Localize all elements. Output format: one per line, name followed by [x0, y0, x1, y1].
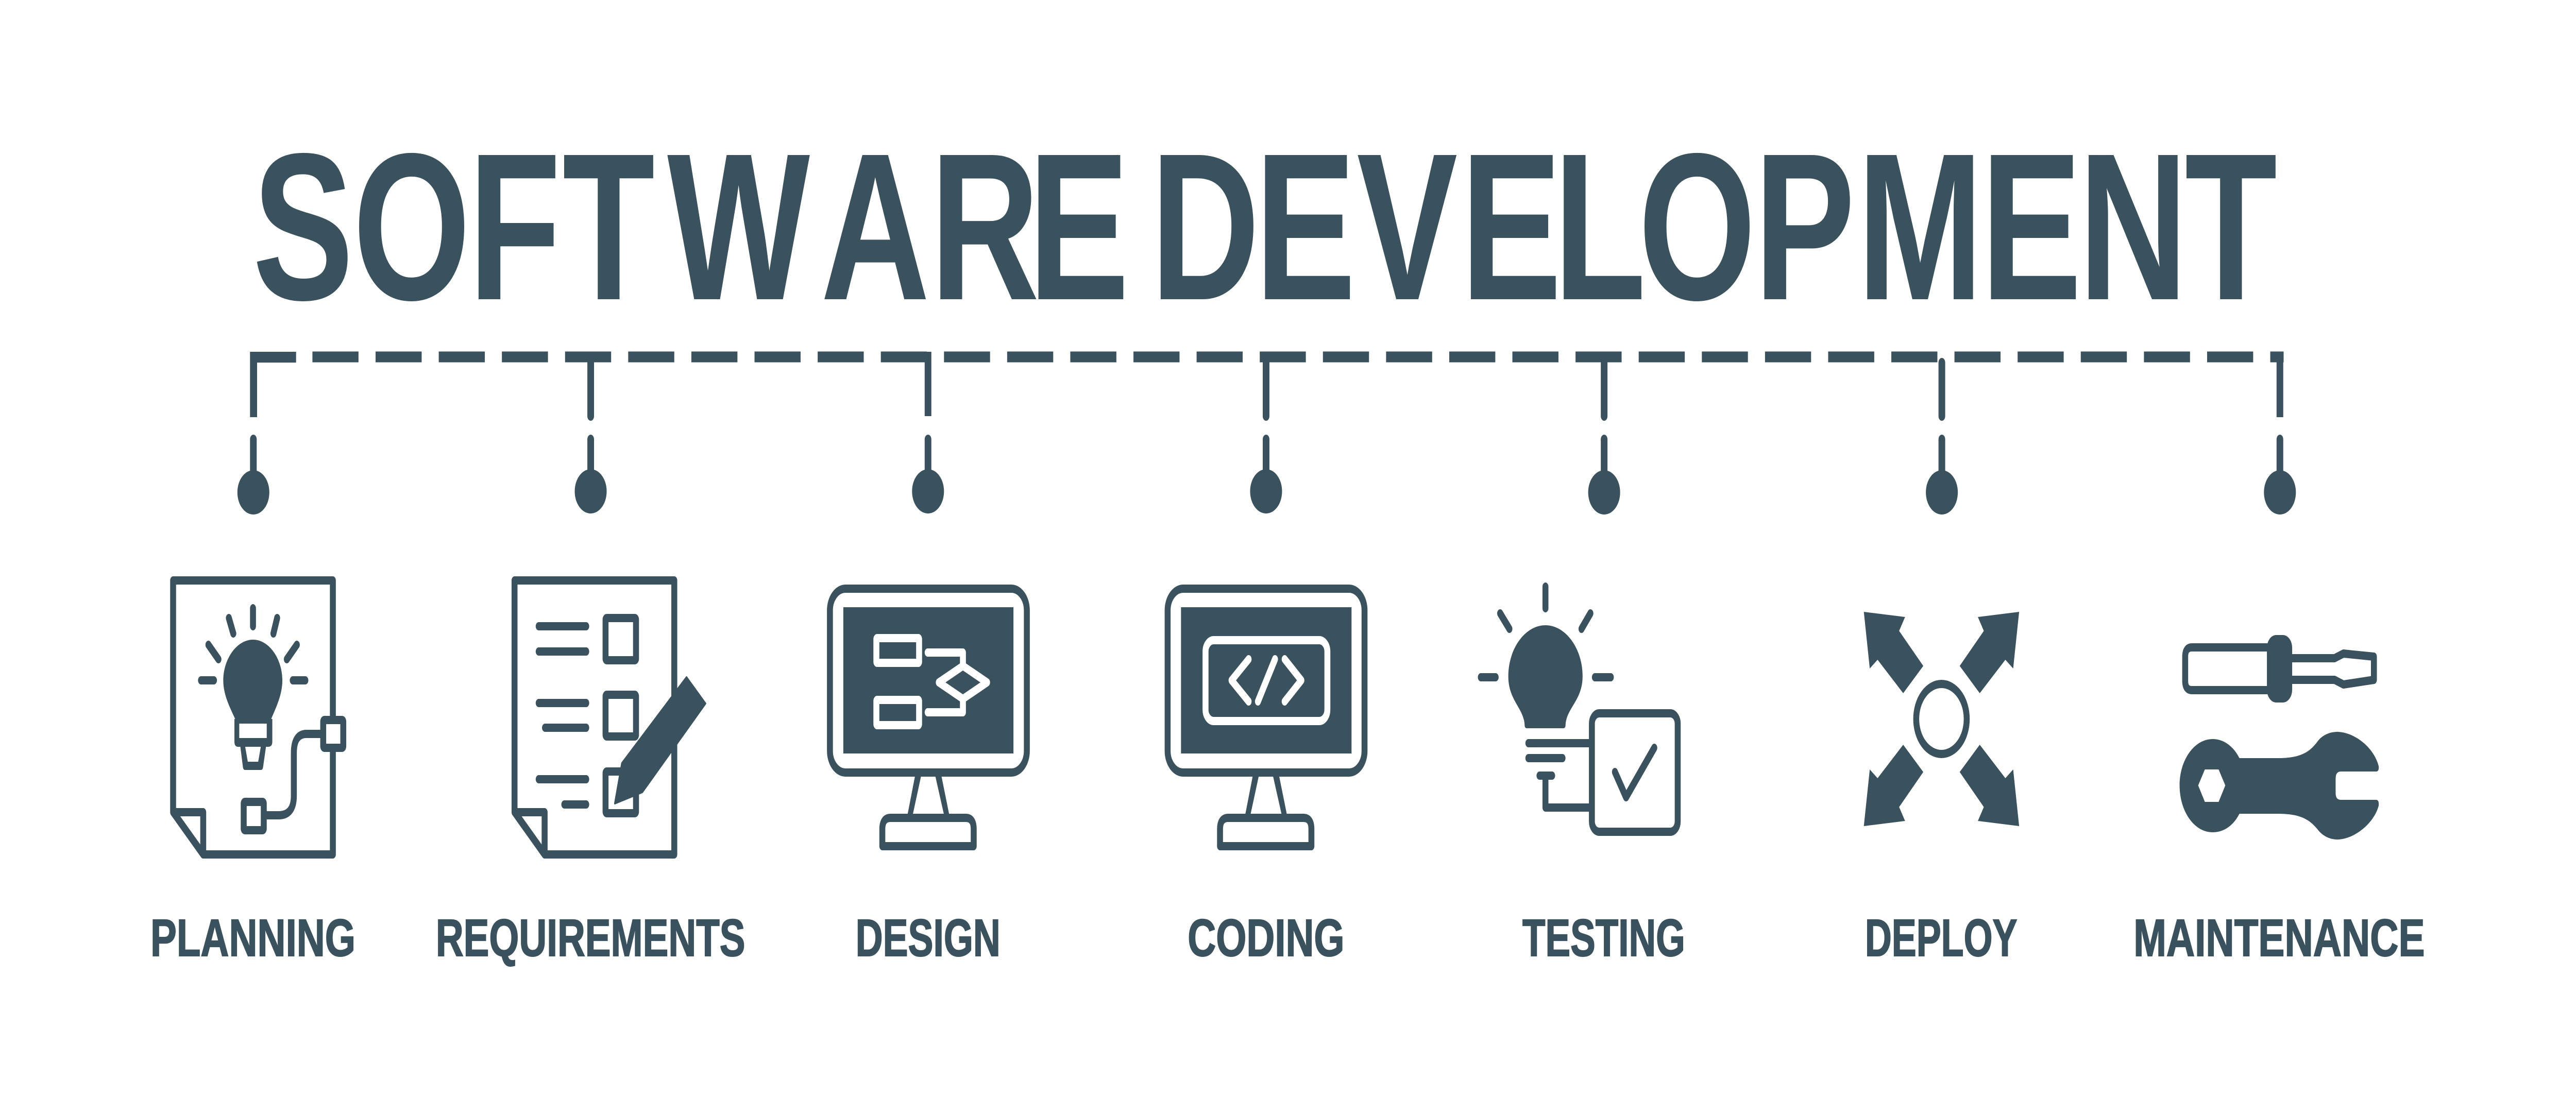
connector and dot: testing: [1588, 363, 1620, 515]
icon: coding monitor with code brackets: [1167, 589, 1365, 846]
label: requirements: REQUIREMENTS: [436, 909, 745, 967]
icon: requirements checklist with pencil: [515, 580, 705, 854]
label: deploy: DEPLOY: [1865, 909, 2017, 967]
label: planning: PLANNING: [150, 909, 355, 967]
connector and dot: planning: [238, 439, 269, 515]
icon: maintenance screwdriver and wrench: [2180, 635, 2379, 839]
label: testing: TESTING: [1522, 909, 1685, 967]
icon: planning document with light bulb: [173, 580, 343, 854]
step: deploy: [1864, 363, 2019, 967]
icon: design monitor with flowchart: [830, 589, 1027, 846]
label: maintenance: MAINTENANCE: [2133, 909, 2425, 967]
connector and dot: maintenance: [2264, 439, 2296, 515]
step: planning: [150, 439, 355, 967]
connector and dot: coding: [1250, 363, 1282, 513]
icon: deploy arrows around circle: [1864, 612, 2019, 826]
step: maintenance: [2133, 439, 2425, 967]
step: requirements: [436, 363, 745, 967]
label: design: DESIGN: [856, 909, 1001, 967]
label: coding: CODING: [1188, 909, 1345, 967]
step: design: [830, 352, 1027, 967]
icon: testing bulb with checklist: [1481, 587, 1677, 832]
dashed timeline connector: [250, 352, 2284, 417]
step: testing: [1481, 363, 1685, 967]
step: coding: [1167, 363, 1365, 967]
connector and dot: requirements: [575, 363, 607, 513]
connector and dot: deploy: [1926, 363, 1958, 515]
connector and dot: design: [912, 352, 944, 513]
title: SOFTWARE DEVELOPMENT: [252, 110, 2277, 344]
